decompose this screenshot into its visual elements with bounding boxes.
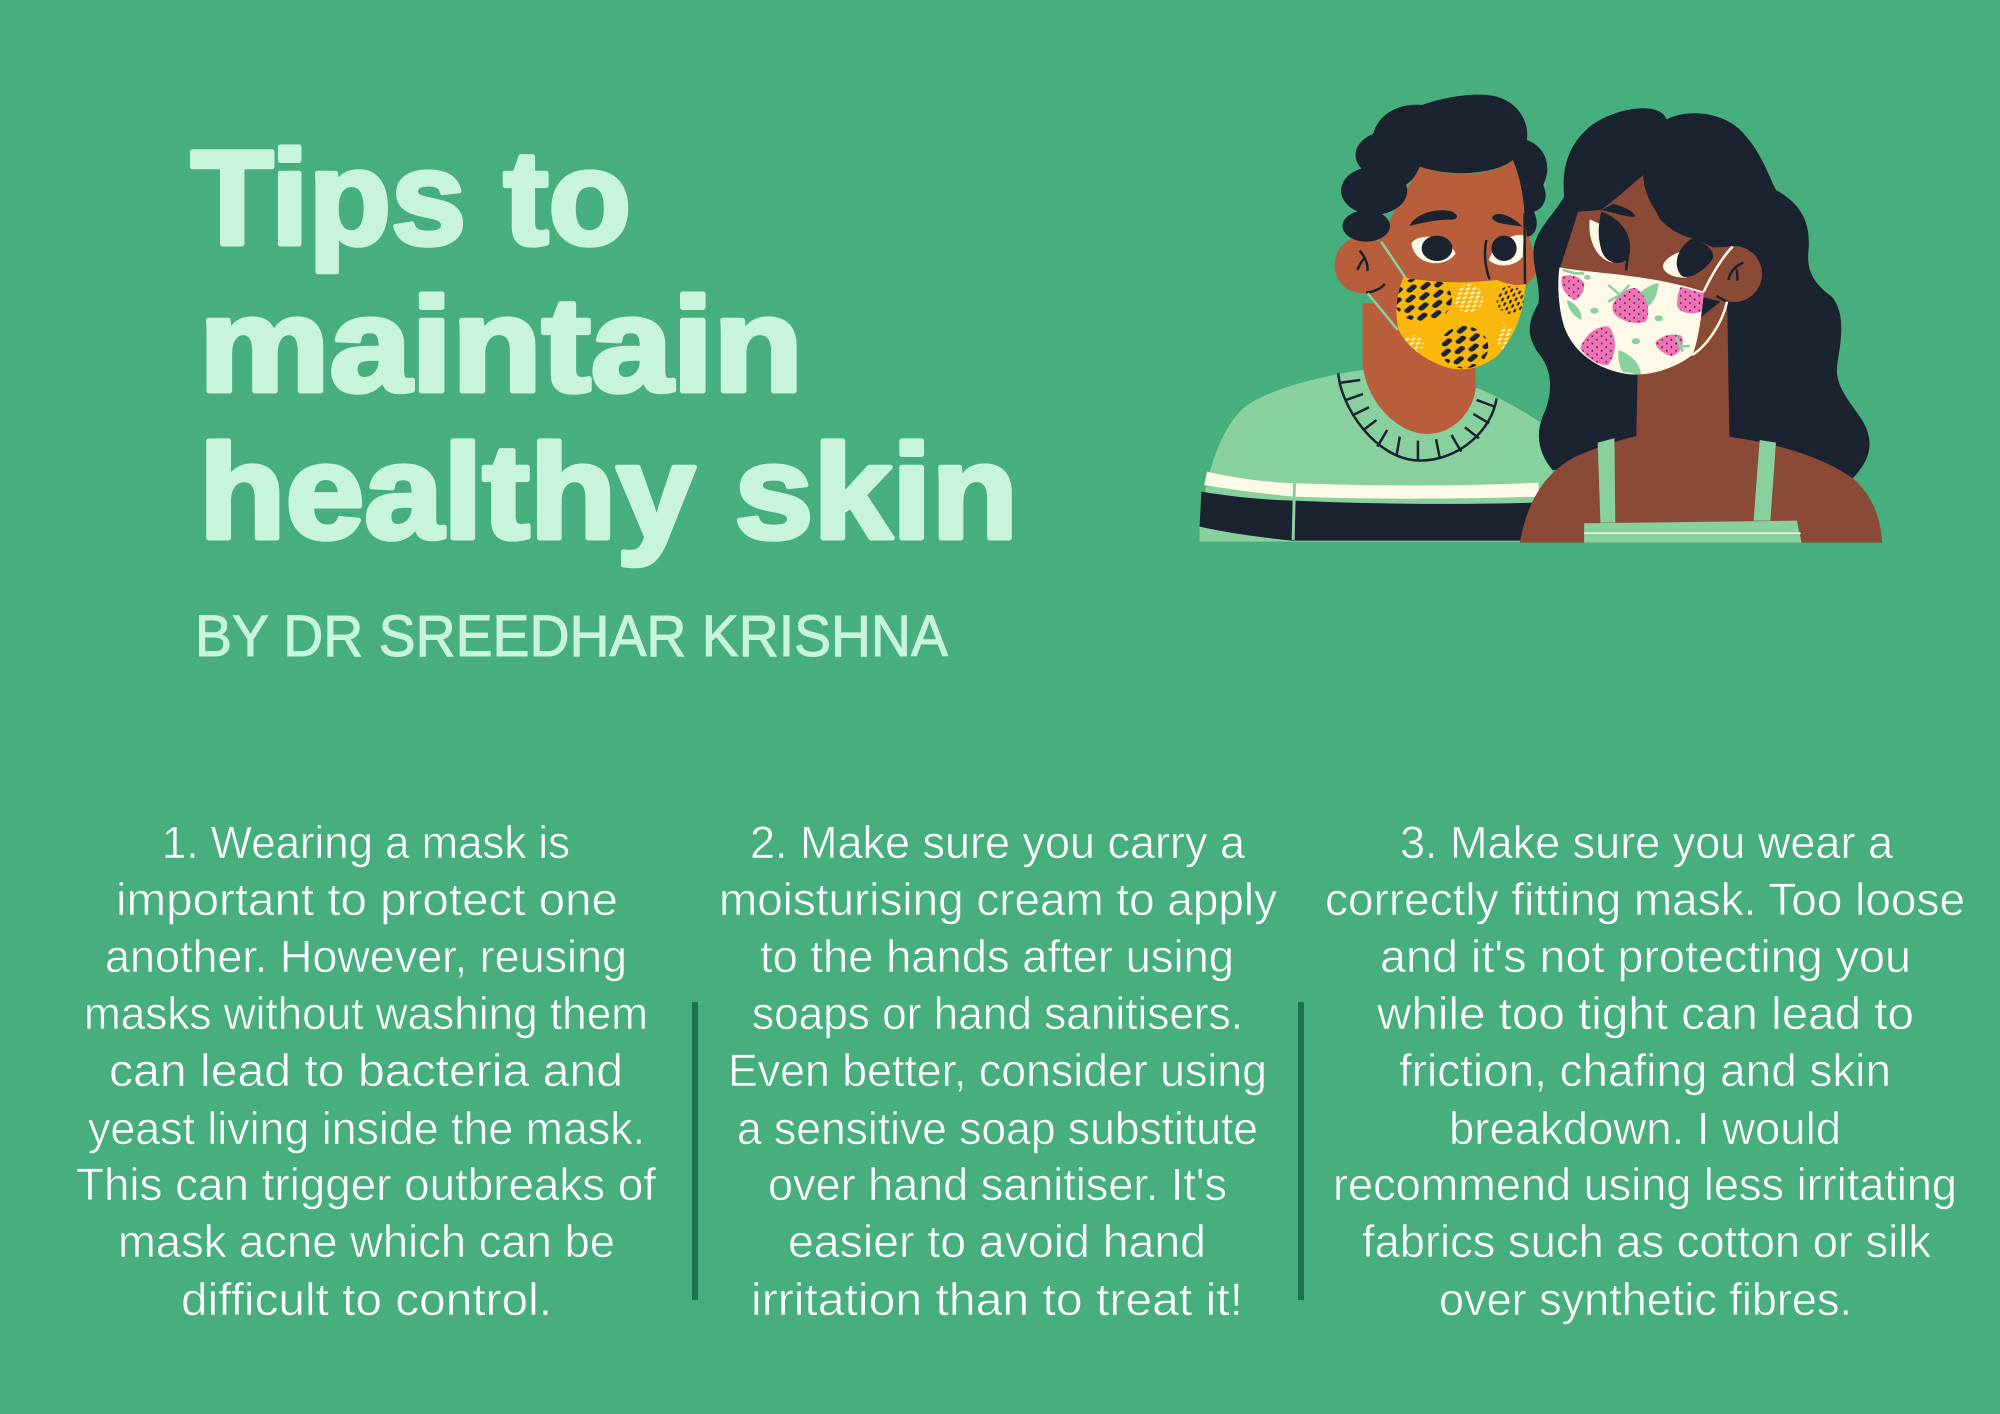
yellow mask [1394,277,1525,369]
tip 3 text: and it's not protecting you [1380,931,1911,982]
tip 3 text: friction, chafing and skin [1399,1045,1891,1096]
man figure [1200,95,1552,542]
title: Tips to [191,124,631,273]
tip 1 text: difficult to control. [181,1274,552,1325]
divider right [1298,1002,1304,1300]
tip 2 text: irritation than to treat it! [751,1274,1243,1325]
tip 2 text: easier to avoid hand [788,1216,1206,1267]
tip 2 text: Even better, consider using [728,1045,1267,1096]
tip 3 text: recommend using less irritating [1333,1159,1957,1210]
tip 1 text: another. However, reusing [105,931,627,982]
tip 2 text: moisturising cream to apply [719,874,1278,925]
tip 1 text [76,817,657,1325]
tip 1 text: 1. Wearing a mask is [162,817,570,868]
tip 2 text: over hand sanitiser. It's [768,1159,1227,1210]
tip 1 text: can lead to bacteria and [109,1045,623,1096]
tip 1 text: masks without washing them [84,988,648,1039]
woman figure [1520,108,1882,543]
tip 2 text: soaps or hand sanitisers. [752,988,1243,1039]
strawberry mask [1558,267,1706,375]
dress straps and bodice [1584,438,1802,543]
tip 2 text: 2. Make sure you carry a [750,817,1246,868]
tip 1 text: This can trigger outbreaks of [76,1159,657,1210]
tip 2 text [719,817,1278,1325]
title: healthy skin [199,418,1018,567]
tip 1 text: important to protect one [116,874,618,925]
tip 3 text: while too tight can lead to [1376,988,1914,1039]
tip 1 text: mask acne which can be [118,1216,615,1267]
tip 3 text [1325,817,1965,1325]
tip 3 text: fabrics such as cotton or silk [1362,1216,1931,1267]
tip 3 text: breakdown. I would [1449,1103,1841,1154]
tip 2 text: to the hands after using [760,931,1234,982]
title: maintain [199,271,803,420]
title [191,124,1018,567]
subtitle: author byline: BY DR SREEDHAR KRISHNA [195,604,948,669]
divider left [692,1002,698,1300]
tip 3 text: correctly fitting mask. Too loose [1325,874,1965,925]
illustration: couple wearing masks [1200,95,1882,543]
tip 3 text: over synthetic fibres. [1439,1274,1852,1325]
tip 3 text: 3. Make sure you wear a [1400,817,1894,868]
tip 1 text: yeast living inside the mask. [88,1103,645,1154]
tip 2 text: a sensitive soap substitute [737,1103,1258,1154]
